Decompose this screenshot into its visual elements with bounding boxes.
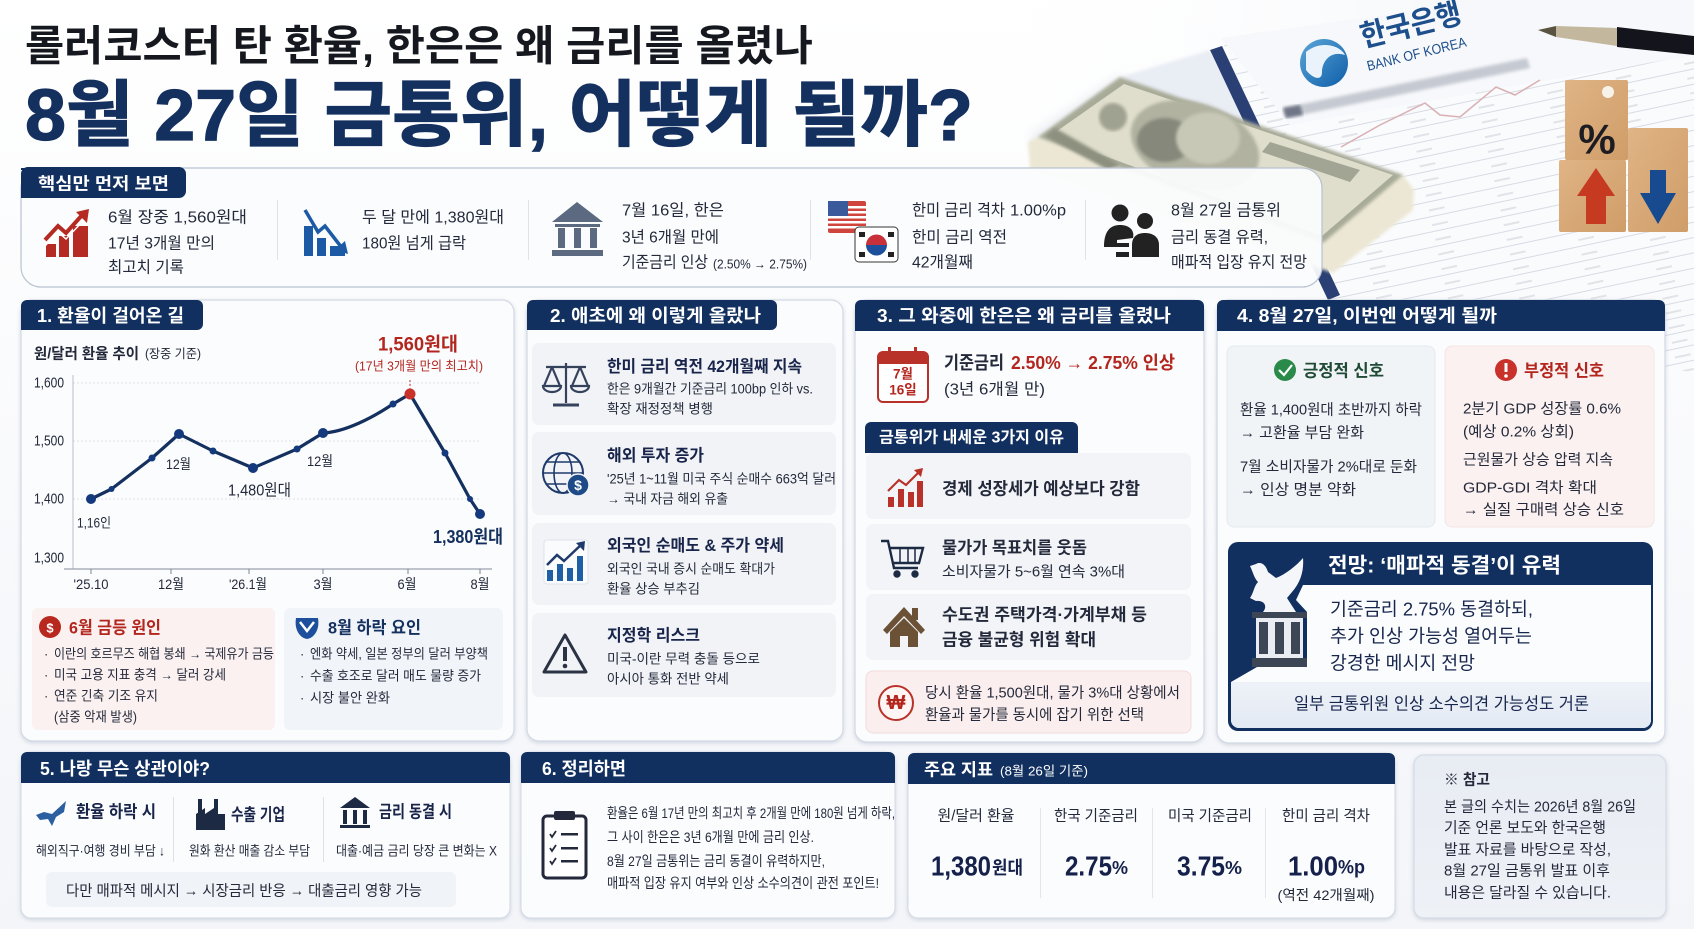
line chart: won/dollar rate: 1,380원대 — [433, 527, 503, 547]
summary item: July hike — [552, 202, 807, 272]
summary text: 8월 27일 금통위는 금리 동결이 유력하지만, — [607, 853, 825, 869]
box: positive signals: 긍정적 신호 — [1303, 362, 1384, 380]
line chart: won/dollar rate: 1,480원대 — [228, 482, 291, 500]
card: prices above target: 소비자물가 5~6월 연속 3%대 — [942, 564, 1125, 580]
line chart: won/dollar rate: 1,560원대 — [378, 334, 458, 356]
dollar bundle — [1028, 77, 1414, 273]
summary item: July hike: 기준금리 인상 — [622, 254, 708, 272]
panel 2 heading — [527, 300, 777, 330]
line chart: won/dollar rate: 1,300 — [34, 550, 64, 566]
summary text: 환율은 6월 17년 만의 최고치 후 2개월 만에 180원 넘게 하락, — [607, 805, 895, 821]
callout: June surge causes: · — [44, 646, 48, 662]
indicator: US base rate: % — [1225, 858, 1242, 878]
icon: calendar July 16: 7월 — [893, 366, 913, 382]
panel 4 heading — [1217, 300, 1665, 331]
panel: note: 발표 자료를 바탕으로 작성, — [1444, 842, 1611, 858]
summary text: 매파적 입장 유지 여부와 인상 소수의견이 관전 포인트! — [607, 875, 879, 891]
indicator: Korea base rate — [1054, 808, 1138, 882]
card: prices above target — [866, 524, 1191, 590]
callout: August fall factors: 엔화 약세, 일본 정부의 달러 부양책 — [310, 646, 488, 662]
panel: note: 기준 언론 보도와 한국은행 — [1444, 820, 1606, 836]
card: rate inversion: 한은 9개월간 기준금리 100bp 인하 vs. — [607, 382, 813, 396]
box: negative signals: (예상 0.2% 상회) — [1463, 424, 1574, 440]
column: exporters: 수출 기업 — [231, 806, 285, 824]
card: housing and debt: 금융 불균형 위험 확대 — [942, 630, 1096, 650]
panel 2: why it rose — [527, 300, 843, 741]
card: rate inversion: 한미 금리 역전 42개월째 지속 — [607, 357, 802, 376]
line chart: won/dollar rate — [34, 334, 503, 592]
indicator: Korea base rate: 2.75 — [1065, 850, 1112, 882]
summary item: July hike: 3년 6개월 만에 — [622, 228, 719, 246]
callout: August fall factors: 8월 하락 요인 — [328, 618, 421, 638]
icon: scales — [543, 363, 589, 405]
rate hike text: 기준금리 — [944, 353, 1004, 373]
outlook box: hawkish hold: 전망: ‘매파적 동결’이 유력 — [1328, 554, 1561, 578]
summary item: flags and rate gap: 1.00%p — [1010, 202, 1066, 220]
sub heading: three reasons — [865, 422, 1078, 453]
indicator: US base rate — [1168, 808, 1252, 882]
line chart: won/dollar rate: 12월 — [166, 456, 191, 472]
summary item: June high: 17년 3개월 만의 — [108, 234, 215, 252]
chart subtitle: 원/달러 환율 추이 — [34, 346, 139, 362]
callout: August fall factors: 시장 불안 완화 — [310, 690, 390, 706]
summary item: flags and rate gap: 한미 금리 격차 — [912, 202, 1005, 220]
callout: August fall factors: · — [300, 668, 304, 684]
summary heading tag — [21, 167, 186, 198]
summary item: flags and rate gap: 42개월째 — [912, 254, 973, 272]
indicator: won per dollar: 원/달러 환율 — [938, 808, 1014, 824]
chart subtitle: (장중 기준) — [145, 347, 201, 361]
outlook box: hawkish hold: 일부 금통위원 인상 소수의견 가능성도 거론 — [1294, 694, 1589, 714]
panel 1 heading: 1. 환율이 걸어온 길 — [37, 306, 184, 326]
summary item: two-month drop — [304, 208, 504, 256]
column: exporters — [189, 799, 310, 858]
line chart: won/dollar rate: 1,500 — [34, 432, 64, 450]
title line 1: 롤러코스터 탄 환율, 한은은 왜 금리를 올렸나 — [25, 22, 813, 70]
card: housing and debt: 수도권 주택가격·가계부채 등 — [942, 606, 1147, 624]
icon: green check — [1274, 359, 1296, 381]
column: exchange rate falls: 환율 하락 시 — [76, 802, 156, 822]
band: hawkish message: 다만 매파적 메시지 → 시장금리 반응 → 대출금리 영향 가능 — [66, 882, 422, 900]
icon: red bar chart — [888, 468, 923, 507]
card: geopolitical risk: 미국-이란 무력 충돌 등으로 — [607, 652, 760, 666]
card: overseas investment: 해외 투자 증가 — [607, 446, 704, 465]
summary item: June high — [45, 208, 247, 276]
callout: June surge causes — [32, 608, 275, 730]
column: exchange rate falls — [36, 801, 165, 858]
panel: key indicators — [908, 753, 1395, 918]
summary text: 그 사이 한은은 3년 6개월 만에 금리 인상. — [607, 829, 814, 845]
outlook box: hawkish hold — [1228, 542, 1653, 731]
line chart: won/dollar rate: (17년 3개월 만의 최고치) — [355, 358, 483, 374]
card: housing and debt — [866, 594, 1191, 660]
column: rate freeze: 대출·예금 금리 당장 큰 변화는 X — [336, 844, 497, 858]
box: negative signals — [1445, 346, 1654, 527]
indicator: rate gap: (역전 42개월째) — [1278, 887, 1374, 903]
card: strong growth: 경제 성장세가 예상보다 강함 — [942, 480, 1140, 498]
summary item: July hike: 7월 16일, 한은 — [622, 202, 724, 220]
indicators heading — [908, 753, 1395, 784]
panel 6 heading: 6. 정리하면 — [542, 759, 626, 779]
column: rate freeze — [336, 797, 497, 858]
card: foreign selling: 외국인 순매도 & 주가 약세 — [607, 536, 784, 555]
line chart: won/dollar rate: 1,400 — [34, 490, 64, 508]
line chart: won/dollar rate: '26.1월 — [229, 576, 267, 592]
chart subtitle — [34, 346, 201, 362]
card: prices above target: 물가가 목표치를 웃돔 — [942, 538, 1087, 558]
summary item: Aug 27 outlook: 금리 동결 유력, — [1171, 228, 1268, 246]
callout: August fall factors: · — [300, 646, 304, 662]
icon: stock chart — [544, 540, 588, 584]
indicators heading: (8월 26일 기준) — [1000, 764, 1088, 778]
box: positive signals: → 인상 명분 약화 — [1240, 482, 1356, 498]
panel: note: 내용은 달라질 수 있습니다. — [1444, 884, 1611, 902]
indicator: rate gap: 한미 금리 격차 — [1282, 808, 1370, 824]
box: negative signals: → 실질 구매력 상승 신호 — [1463, 502, 1624, 518]
sub heading: three reasons: 금통위가 내세운 3가지 이유 — [879, 428, 1064, 446]
column: exporters: 원화 환산 매출 감소 부담 — [189, 844, 310, 858]
summary item: Aug 27 outlook: 8월 27일 금통위 — [1171, 202, 1281, 220]
summary heading tag: 핵심만 먼저 보면 — [38, 174, 169, 194]
panel 3 heading: 3. 그 와중에 한은은 왜 금리를 올렸나 — [877, 306, 1171, 326]
callout: June surge causes: 연준 긴축 기조 유지 — [54, 688, 158, 704]
icon: hawk on pillar — [1250, 558, 1307, 667]
panel 3: why the BOK hiked — [855, 300, 1204, 742]
card: geopolitical risk: 지정학 리스크 — [607, 626, 700, 645]
summary item: flags and rate gap — [828, 201, 1066, 272]
Bank of Korea logo and name: BANK OF KOREA — [1365, 33, 1468, 74]
indicator: Korea base rate: % — [1112, 858, 1128, 878]
card: overseas investment — [532, 432, 836, 515]
box: positive signals: → 고환율 부담 완화 — [1240, 424, 1364, 442]
indicator: Korea base rate: 한국 기준금리 — [1054, 808, 1138, 824]
panel 6: summary — [521, 752, 895, 918]
callout: August fall factors — [284, 608, 503, 730]
summary item: flags and rate gap: 한미 금리 역전 — [912, 228, 1007, 246]
icon: calendar July 16: 16일 — [889, 382, 917, 398]
icon: shopping cart — [881, 541, 923, 576]
wooden blocks with percent and arrows: % — [1578, 116, 1616, 162]
line chart: won/dollar rate: 1,600 — [34, 374, 64, 392]
indicator: US base rate: 미국 기준금리 — [1168, 808, 1252, 824]
outlook box: hawkish hold: 기준금리 2.75% 동결하되, — [1330, 598, 1533, 620]
callout: won and inflation: 당시 환율 1,500원대, 물가 3%대 상황에서 — [925, 684, 1180, 702]
indicators heading: 주요 지표 — [924, 760, 993, 780]
icon: globe with dollar — [543, 453, 589, 496]
column: rate freeze: 금리 동결 시 — [379, 802, 452, 822]
wooden blocks with percent and arrows — [1559, 80, 1688, 232]
card: geopolitical risk: 아시아 통화 전반 약세 — [607, 672, 729, 686]
callout: June surge causes: 6월 금등 원인 — [69, 618, 161, 638]
card: strong growth — [866, 453, 1191, 519]
callout: June surge causes: · — [44, 668, 48, 682]
icon: won coin: ₩ — [887, 692, 906, 714]
summary item: two-month drop: 두 달 만에 1,380원대 — [362, 208, 504, 226]
icon: won coin — [879, 686, 913, 720]
rate hike text: 2.50% → 2.75% 인상 — [1011, 353, 1175, 373]
icon: plane — [36, 801, 66, 826]
summary item: Aug 27 outlook: 매파적 입장 유지 전망 — [1171, 254, 1307, 272]
card: foreign selling: 외국인 국내 증시 순매도 확대가 — [607, 562, 775, 576]
card: overseas investment: '25년 1~11월 미국 주식 순매수 663억 달러 — [607, 472, 836, 486]
icon: warning triangle — [544, 635, 586, 672]
icon: factory — [196, 799, 225, 830]
icon: red money badge — [39, 616, 61, 638]
callout: June surge causes: 미국 고용 지표 충격 → 달러 강세 — [54, 668, 226, 682]
summary item: June high: 최고치 기록 — [108, 258, 184, 276]
card: geopolitical risk — [532, 613, 836, 697]
indicator: won per dollar: 1,380 — [931, 850, 991, 882]
panel 4 heading: 4. 8월 27일, 이번엔 어떻게 될까 — [1237, 306, 1497, 326]
card: foreign selling — [532, 523, 836, 605]
outlook box: hawkish hold: 강경한 메시지 전망 — [1330, 652, 1475, 674]
indicator: rate gap: 1.00 — [1288, 850, 1338, 882]
panel: note: 8월 27일 금통위 발표 이후 — [1444, 862, 1610, 880]
icon: house — [883, 607, 925, 647]
panel 4: Aug 27 outlook — [1217, 300, 1665, 743]
pen — [1538, 26, 1694, 55]
navy folder spine — [1210, 46, 1340, 300]
summary item: Aug 27 outlook — [1104, 202, 1307, 272]
panel 5: what it means for me — [21, 752, 510, 918]
box: positive signals — [1227, 346, 1435, 527]
panel 1: exchange rate path — [21, 300, 514, 741]
card: rate inversion — [532, 343, 836, 425]
callout: August fall factors: 수출 호조로 달러 매도 물량 증가 — [310, 668, 481, 684]
report paper with rows — [1221, 0, 1694, 373]
icon: bank — [340, 797, 370, 828]
rate hike text: (3년 6개월 만) — [944, 380, 1045, 398]
icon: blue down chevron — [296, 618, 318, 639]
panel 3 heading — [855, 300, 1204, 331]
box: positive signals: 7월 소비자물가 2%대로 둔화 — [1240, 458, 1417, 476]
panel 6 heading — [521, 752, 895, 783]
box: negative signals: GDP-GDI 격차 확대 — [1463, 480, 1597, 496]
callout: June surge causes: · — [44, 688, 48, 704]
card: overseas investment: → 국내 자금 해외 유출 — [607, 492, 728, 506]
callout: June surge causes: 이란의 호르무즈 해협 봉쇄 → 국제유가 금등 — [54, 646, 274, 662]
panel: note: ※ 참고 — [1444, 772, 1490, 788]
indicator: won per dollar: 원대 — [992, 858, 1023, 878]
Bank of Korea logo and name — [1300, 0, 1468, 87]
card: foreign selling: 환율 상승 부추김 — [607, 582, 700, 596]
outlook box: hawkish hold: 추가 인상 가능성 열어두는 — [1330, 626, 1532, 646]
blurred desk shadow and back sheet — [1030, 50, 1250, 160]
box: negative signals: 2분기 GDP 성장률 0.6% — [1463, 400, 1621, 418]
summary item: July hike: (2.50% → 2.75%) — [713, 256, 807, 272]
summary item: June high: 6월 장중 1,560원대 — [108, 208, 247, 226]
panel: note — [1414, 755, 1666, 918]
band: hawkish message — [46, 872, 456, 907]
summary text — [607, 805, 895, 891]
indicator: won per dollar — [931, 808, 1023, 882]
panel 1 heading — [21, 300, 203, 330]
icon: calendar July 16 — [878, 347, 928, 402]
background photo: Bank of Korea document, dollars, pen and wooden blocks — [1028, 0, 1694, 373]
rate hike text — [944, 353, 1175, 398]
indicator: rate gap — [1278, 808, 1374, 903]
box: positive signals: 환율 1,400원대 초반까지 하락 — [1240, 402, 1422, 418]
line chart: won/dollar rate: 8월 — [470, 576, 490, 592]
card: rate inversion: 확장 재정정책 병행 — [607, 402, 713, 416]
line chart: won/dollar rate: 1,16인 — [77, 516, 111, 530]
panel 5 heading: 5. 나랑 무슨 상관이야? — [40, 759, 210, 779]
panel: key summary — [21, 167, 1322, 287]
summary item: two-month drop: 180원 넘게 급락 — [362, 234, 466, 252]
line chart: won/dollar rate: 12월 — [158, 576, 184, 592]
line chart: won/dollar rate: '25.10 — [74, 576, 109, 592]
panel: note: 본 글의 수치는 2026년 8월 26일 — [1444, 798, 1636, 816]
line chart: won/dollar rate: 6월 — [398, 576, 416, 592]
indicator: US base rate: 3.75 — [1177, 850, 1225, 882]
callout: August fall factors: · — [300, 690, 304, 706]
panel 2 heading: 2. 애초에 왜 이렇게 올랐나 — [550, 306, 761, 326]
icon: red exclamation — [1495, 359, 1517, 381]
box: negative signals: 부정적 신호 — [1524, 362, 1604, 380]
line chart: won/dollar rate: 3월 — [314, 576, 332, 592]
callout: won and inflation — [866, 671, 1191, 733]
box: negative signals: 근원물가 상승 압력 지속 — [1463, 452, 1613, 468]
icon: globe with dollar: $ — [574, 477, 582, 493]
line chart: won/dollar rate: 12월 — [307, 453, 333, 469]
callout: June surge causes: (삼중 악재 발생) — [54, 710, 137, 724]
icon: red money badge: $ — [46, 620, 54, 636]
indicator: rate gap: %p — [1338, 858, 1365, 878]
icon: clipboard — [543, 811, 586, 878]
title line 2: 8월 27일 금통위, 어떻게 될까? — [25, 76, 973, 156]
panel 5 heading — [21, 752, 510, 783]
column: exchange rate falls: 해외직구·여행 경비 부담 ↓ — [36, 844, 165, 858]
callout: won and inflation: 환율과 물가를 동시에 잡기 위한 선택 — [925, 706, 1144, 724]
